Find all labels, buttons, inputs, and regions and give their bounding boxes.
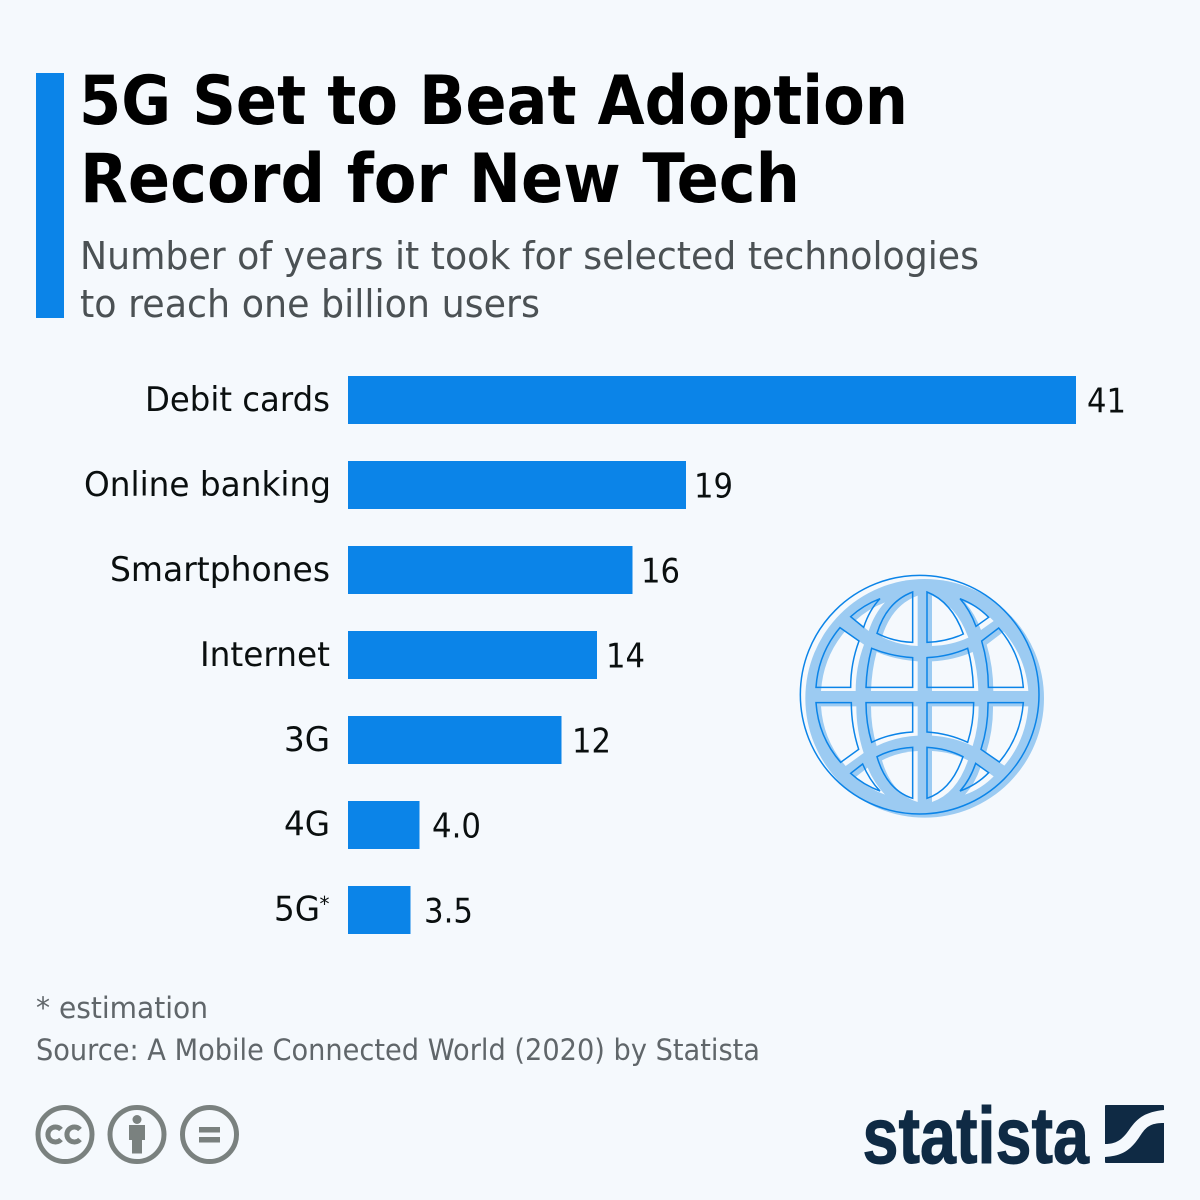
row: Internet: 14 [606,636,645,676]
title accent bar [36,73,64,318]
row: Online banking: 19 [694,466,733,506]
icon: attribution [110,1108,164,1162]
bar chart [84,376,1126,934]
row: Smartphones [110,546,680,594]
row: Smartphones: Smartphones [110,550,330,589]
row: Internet: Internet [200,635,330,674]
footnote: * estimation [36,991,208,1025]
icon: no derivatives [182,1108,236,1162]
row: 3G: 12 [572,722,611,760]
title: 5G Set to Beat Adoption [79,62,908,141]
subtitle [80,234,979,326]
row: Online banking: Online banking [84,465,331,504]
title: Record for New Tech [80,140,800,219]
row: Debit cards: 41 [1087,382,1126,420]
subtitle: to reach one billion users [80,282,540,326]
row: Debit cards: Debit cards [145,380,330,419]
logo mark [1105,1105,1164,1163]
logo wordmark: statista [862,1091,1089,1180]
icon: creative commons [38,1108,92,1162]
row: 4G [284,801,481,849]
row: 3G: 3G [284,720,330,759]
row: 5G estimated: 5G [274,890,320,928]
row: Smartphones: 16 [641,552,680,590]
row: Debit cards [145,376,1126,424]
row: 4G: 4G [284,804,330,844]
row: 5G estimated [274,886,473,934]
row: Online banking [84,461,733,509]
subtitle: Number of years it took for selected technologies [80,234,979,278]
row: 5G estimated: 3.5 [424,892,473,930]
title [79,62,908,219]
row: 5G estimated: * [320,892,330,916]
source: Source: A Mobile Connected World (2020) by Statista [36,1033,760,1067]
row: 3G [284,716,611,764]
row: 4G: 4.0 [432,806,481,846]
row: Internet [200,631,645,679]
icon: globe [800,575,1044,818]
